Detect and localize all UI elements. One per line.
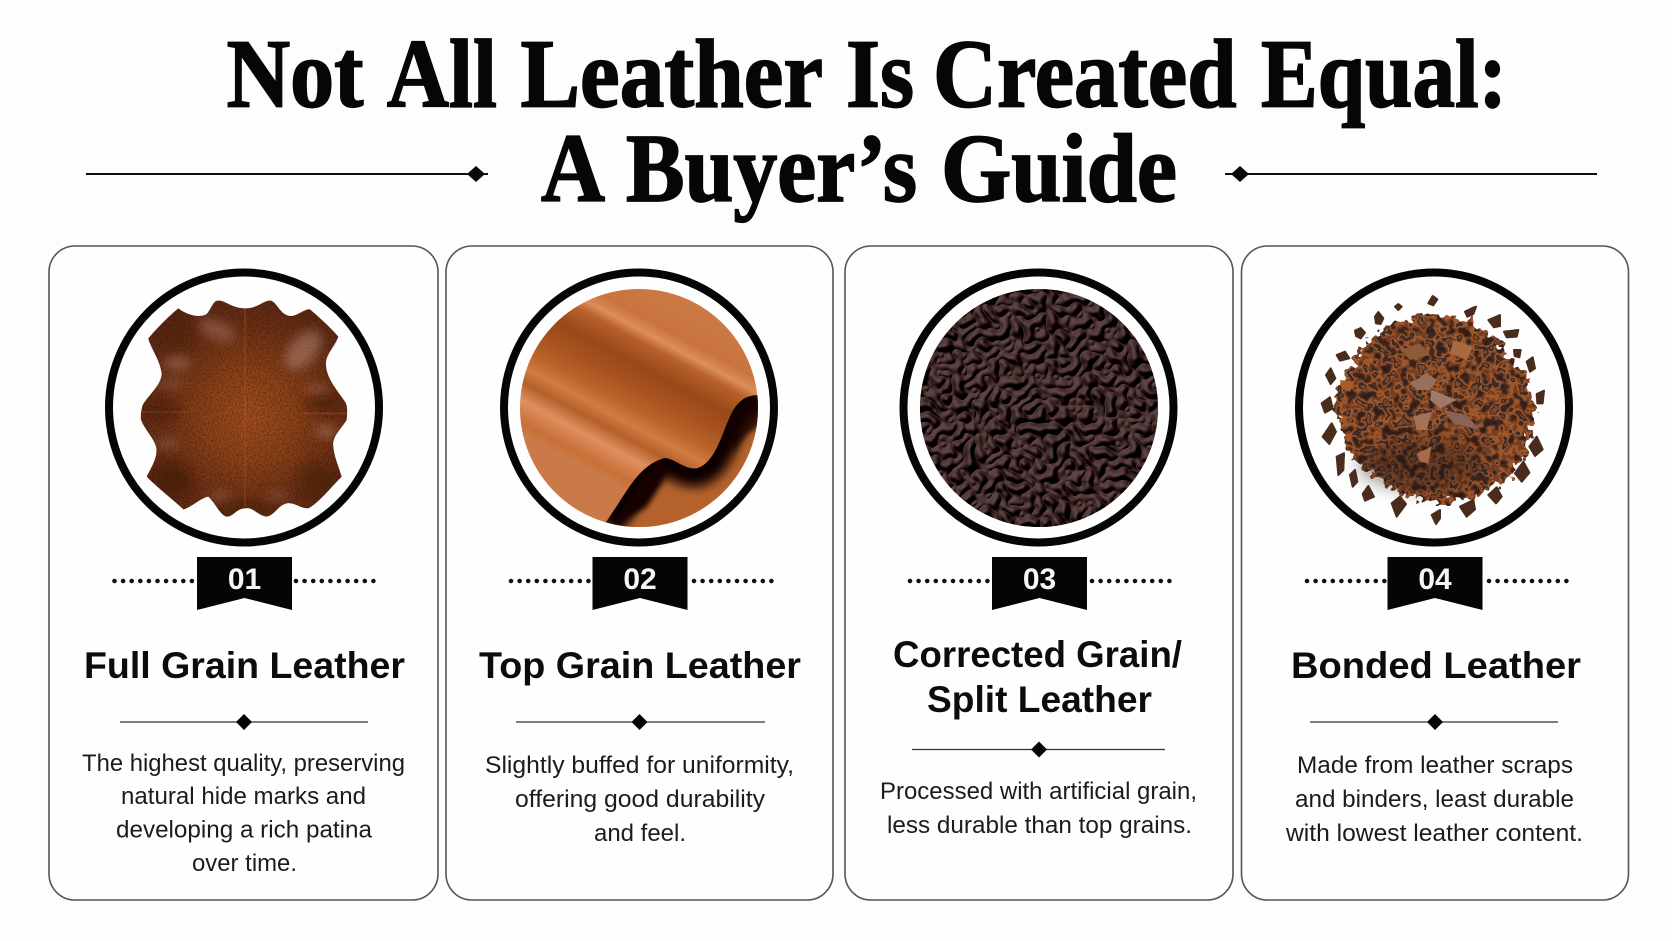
icon: top grain folded leather	[504, 272, 774, 542]
description 1: over time.	[192, 850, 297, 877]
number badge 03: 03	[1023, 563, 1056, 596]
card frame 2	[446, 246, 833, 900]
icon: corrected grain pebbled texture	[904, 272, 1174, 542]
divider 2	[516, 714, 765, 730]
number badge 01	[114, 557, 374, 610]
number badge 03	[910, 557, 1170, 610]
divider 4	[1310, 714, 1558, 730]
icon: full grain hide	[109, 272, 379, 542]
number badge 01: 01	[228, 563, 261, 596]
panel: top grain leather	[446, 246, 833, 900]
number badge 02	[511, 557, 772, 610]
title ornament right	[1225, 166, 1597, 182]
heading 3	[893, 634, 1182, 720]
title ornament left	[86, 166, 488, 182]
heading 2: Top Grain Leather	[479, 645, 801, 686]
description 4: and binders, least durable	[1295, 786, 1574, 813]
description 3	[880, 778, 1197, 839]
title: Is	[846, 20, 914, 128]
title: A	[541, 115, 605, 222]
card frame 4	[1242, 246, 1628, 900]
number badge 04	[1307, 557, 1566, 610]
icon: bonded leather scraps pile	[1299, 272, 1569, 542]
panel: bonded leather	[1242, 246, 1628, 900]
description 2: and feel.	[594, 820, 686, 847]
title: Buyer’s	[626, 115, 917, 222]
description 2	[485, 752, 794, 847]
heading 4: Bonded Leather	[1291, 645, 1581, 686]
title: Not	[227, 20, 363, 128]
description 4: Made from leather scraps	[1297, 752, 1573, 779]
heading 1: Full Grain Leather	[84, 645, 405, 686]
description 3: less durable than top grains.	[887, 812, 1192, 839]
description 4	[1285, 752, 1583, 847]
title: Created	[933, 20, 1236, 128]
title: All	[387, 20, 497, 128]
description 2: offering good durability	[515, 786, 766, 813]
heading 3: Split Leather	[927, 679, 1152, 720]
number badge 04: 04	[1418, 563, 1452, 596]
description 1: The highest quality, preserving	[82, 750, 405, 777]
description 2: Slightly buffed for uniformity,	[485, 752, 794, 779]
divider 1	[120, 714, 368, 730]
description 3: Processed with artificial grain,	[880, 778, 1197, 805]
title: Leather	[520, 20, 823, 128]
heading 3: Corrected Grain/	[893, 634, 1182, 675]
description 1: natural hide marks and	[121, 783, 366, 810]
panel: full grain leather	[49, 246, 438, 900]
description 1: developing a rich patina	[116, 816, 372, 844]
title: Equal:	[1261, 20, 1507, 128]
number badge 02: 02	[623, 563, 657, 596]
divider 3	[912, 742, 1165, 758]
panel: corrected grain / split leather	[845, 246, 1233, 900]
description 1	[82, 750, 405, 877]
title	[227, 20, 1507, 222]
description 4: with lowest leather content.	[1285, 820, 1583, 847]
title: Guide	[941, 115, 1177, 222]
card frame 1	[49, 246, 438, 900]
scattered flakes	[1322, 296, 1544, 524]
card frame 3	[845, 246, 1233, 900]
